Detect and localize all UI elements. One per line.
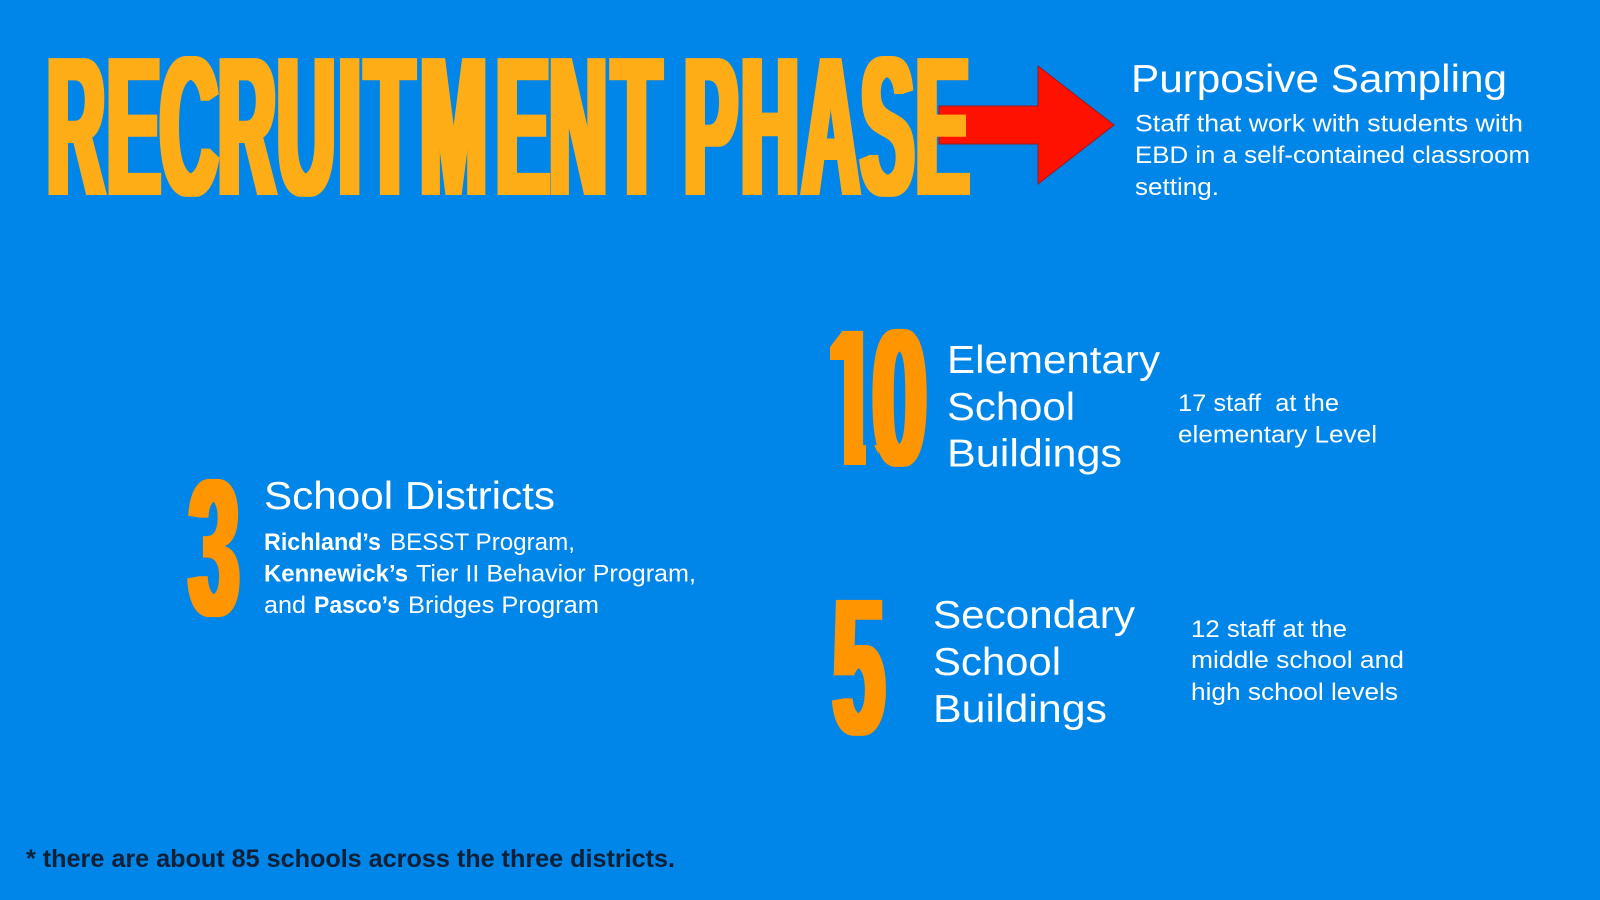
text block: secondary staff: middle school and	[1191, 647, 1404, 674]
text block: staff description: EBD in a self-contained classroom	[1135, 142, 1530, 169]
text block: district programs: BESST Program,	[390, 529, 575, 556]
text block: elementary staff: 17 staff at the	[1178, 390, 1339, 417]
title: RECRUITMENT PHASE	[47, 16, 969, 238]
text block: district programs	[264, 529, 696, 619]
footnote: * there are about 85 schools across the three districts.	[26, 845, 675, 873]
number: 10: 10	[823, 288, 927, 507]
text block: district programs: Bridges Program	[408, 592, 599, 619]
text block: elementary staff: elementary Level	[1178, 422, 1377, 448]
text block: staff description: setting.	[1135, 174, 1219, 201]
text block: secondary staff: 12 staff at the	[1191, 616, 1347, 643]
text block: district programs: Richland’s	[264, 529, 381, 556]
panel: purposive sampling	[1131, 58, 1530, 201]
panel: elementary	[830, 328, 1376, 474]
heading: elementary school buildings: Elementary	[947, 339, 1161, 382]
text block: staff description	[1135, 110, 1530, 201]
heading: elementary school buildings: Buildings	[947, 432, 1122, 476]
text block: staff description: Staff that work with students with	[1135, 110, 1523, 138]
number: 5: 5	[833, 559, 885, 776]
text block: district programs: Tier II Behavior Program,	[416, 560, 696, 588]
heading: purposive sampling: Purposive Sampling	[1131, 58, 1507, 101]
heading: secondary school buildings: School	[933, 641, 1061, 684]
text block: district programs: Kennewick’s	[264, 560, 408, 588]
heading: secondary school buildings: Secondary	[933, 594, 1136, 637]
panel: school districts	[189, 440, 696, 657]
text block: secondary staff	[1191, 616, 1404, 706]
heading: secondary school buildings	[933, 594, 1136, 731]
icon: red arrow	[939, 66, 1114, 184]
text block: secondary staff: high school levels	[1191, 679, 1398, 706]
text block: elementary staff	[1178, 390, 1377, 448]
number: 3: 3	[189, 440, 239, 657]
heading: elementary school buildings: School	[947, 386, 1075, 429]
heading: school districts: School Districts	[264, 475, 555, 518]
text block: district programs: and	[264, 592, 306, 619]
heading: secondary school buildings: Buildings	[933, 688, 1107, 731]
text block: district programs: Pasco’s	[314, 592, 400, 619]
panel: secondary	[833, 559, 1404, 776]
heading: elementary school buildings	[947, 339, 1161, 476]
